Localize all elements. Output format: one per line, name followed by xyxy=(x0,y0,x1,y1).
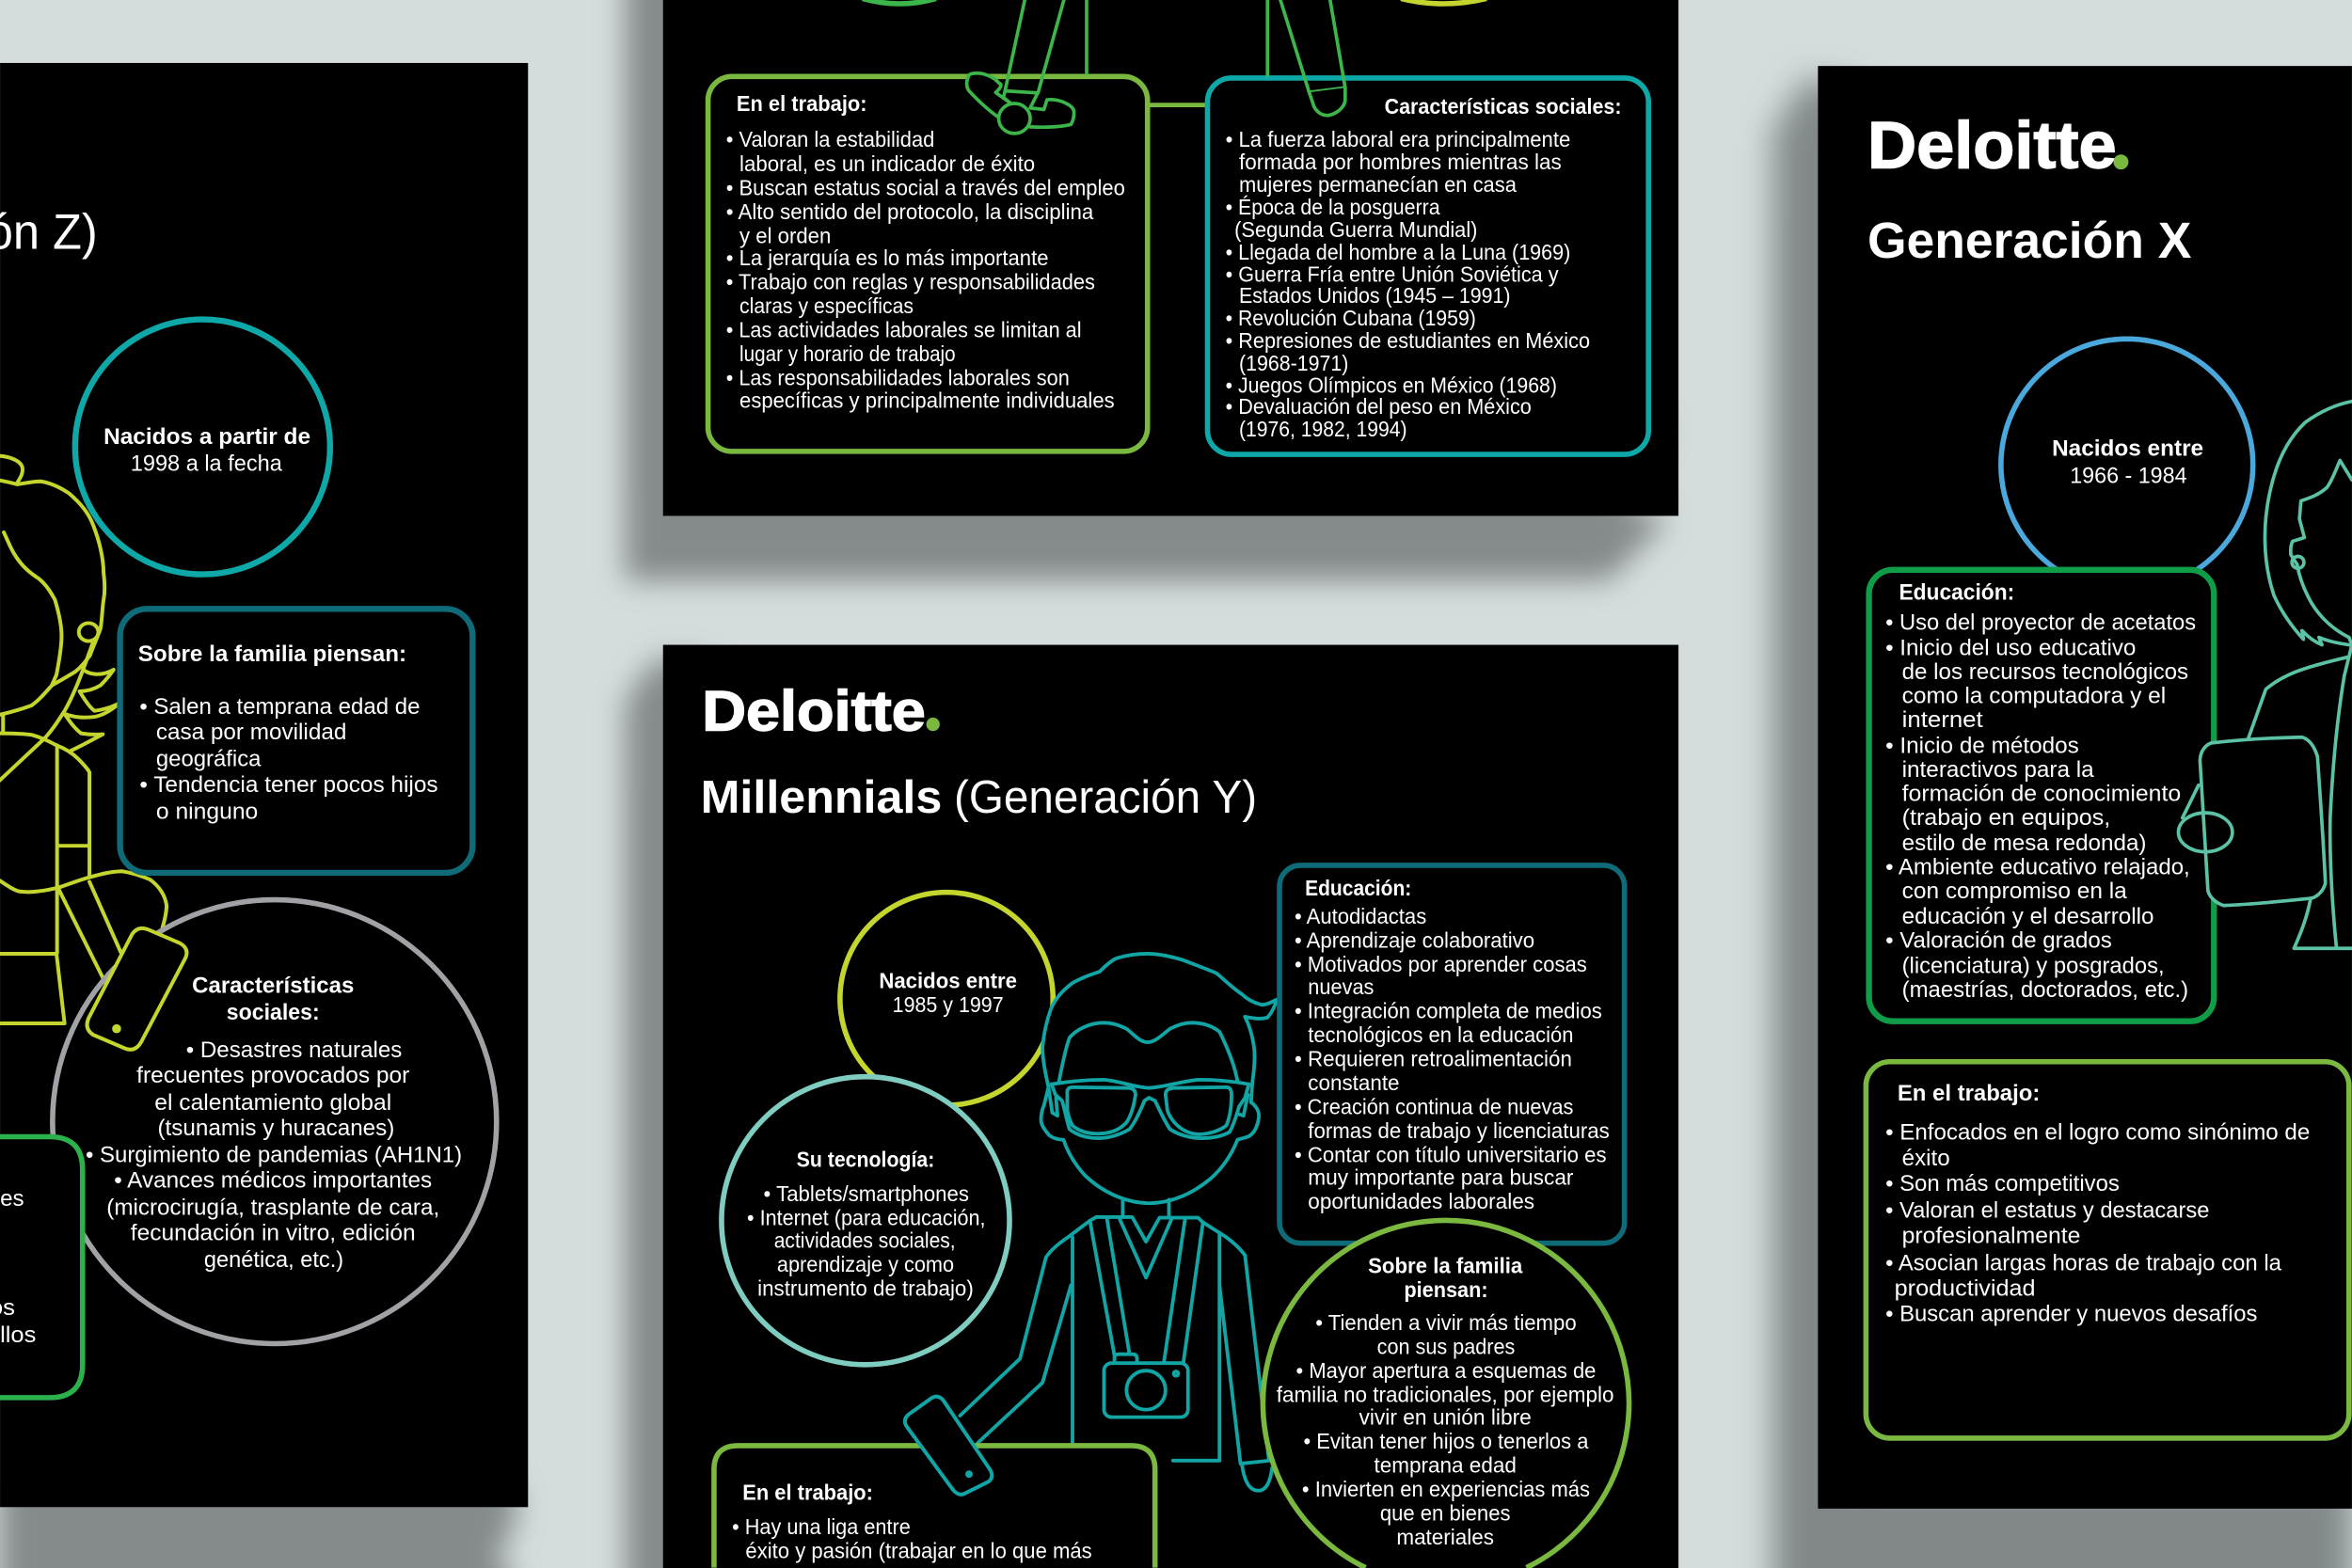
box: Características sociales xyxy=(1207,78,1648,454)
box: En el trabajo: En el trabajo: xyxy=(737,91,867,116)
box: Características sociales: Estados Unidos (1945 – 1991) xyxy=(1239,283,1511,308)
box: Sobre la familia piensan: • Tendencia tener pocos hijos xyxy=(139,772,438,798)
circle: Características sociales: • Desastres naturales xyxy=(186,1037,402,1063)
panel: Millennials poster xyxy=(663,645,1678,1568)
box: En el trabajo: • La jerarquía es lo más importante xyxy=(726,245,1048,270)
circle: birth years: 1966 - 1984 xyxy=(2070,463,2187,488)
circle: Su tecnología: Su tecnología: xyxy=(797,1147,934,1171)
box: cropped green text box: llos xyxy=(0,1323,36,1348)
box: Educación: Educación: xyxy=(1305,876,1411,900)
circle: Características sociales: frecuentes provocados por xyxy=(136,1063,409,1088)
box: En el trabajo: • Las responsabilidades laborales son xyxy=(726,366,1070,390)
icon: smartphone xyxy=(905,1397,992,1495)
panel: Baby Boomers poster (lower part) xyxy=(663,0,1678,515)
box: Educación: • Aprendizaje colaborativo xyxy=(1295,928,1534,953)
panel: Generación X poster xyxy=(1818,66,2352,1509)
box: En el trabajo: • Valoran el estatus y destacarse xyxy=(1885,1198,2209,1224)
box: Educación: • Contar con título universitario es xyxy=(1295,1143,1607,1167)
box: Características sociales: mujeres permanecían en casa xyxy=(1239,172,1517,197)
box: Características sociales: (1976, 1982, 1994) xyxy=(1239,417,1407,441)
circle: Sobre la familia piensan: • Evitan tener hijos o tenerlos a xyxy=(1304,1429,1589,1453)
box: Educación: como la computadora y el xyxy=(1902,684,2166,709)
box: Sobre la familia piensan: • Salen a temprana edad de xyxy=(139,694,420,720)
box: Características sociales: • Juegos Olímpicos en México (1968) xyxy=(1226,373,1557,398)
box: En el trabajo: éxito xyxy=(1902,1146,1950,1171)
box: En el trabajo: laboral, es un indicador de éxito xyxy=(739,151,1035,176)
box: Características sociales: • Represiones de estudiantes en México xyxy=(1226,328,1590,353)
box: En el trabajo: específicas y principalmente individuales xyxy=(739,388,1115,413)
box: En el trabajo: • Enfocados en el logro como sinónimo de xyxy=(1885,1120,2310,1146)
circle: birth years xyxy=(75,320,330,575)
title: Millennials (Generación Y) xyxy=(701,771,1257,823)
box: Sobre la familia piensan: casa por movilidad xyxy=(156,720,346,745)
circle: Su tecnología: instrumento de trabajo) xyxy=(757,1275,974,1300)
box: Educación: estilo de mesa redonda) xyxy=(1902,831,2147,856)
circle: Sobre la familia piensan: con sus padres xyxy=(1377,1335,1515,1359)
box: Sobre la familia piensan: geográfica xyxy=(156,747,262,772)
box: Educación xyxy=(1279,865,1625,1243)
illustration: girl with phone xyxy=(0,456,167,1023)
box: Educación: • Motivados por aprender cosas xyxy=(1295,952,1587,976)
box: Características sociales: • Llegada del hombre a la Luna (1969) xyxy=(1226,240,1570,264)
box: Educación: internet xyxy=(1902,707,1983,733)
circle: Sobre la familia piensan: temprana edad xyxy=(1374,1453,1517,1478)
box: Educación: • Ambiente educativo relajado, xyxy=(1885,854,2190,879)
box: Educación: • Valoración de grados xyxy=(1885,928,2112,954)
box: En el trabajo: • Valoran la estabilidad xyxy=(726,127,934,151)
circle: Su tecnología: aprendizaje y como xyxy=(777,1252,954,1276)
box: Educación: nuevas xyxy=(1308,974,1374,999)
box: Educación: formas de trabajo y licenciaturas xyxy=(1308,1118,1610,1143)
box: Características sociales: Características sociales: xyxy=(1385,94,1622,119)
box: Educación: interactivos para la xyxy=(1902,757,2094,783)
circle: Sobre la familia piensan: familia no tradicionales, por ejemplo xyxy=(1277,1383,1614,1407)
panel: Generación Z poster xyxy=(0,63,528,1507)
circle: Su tecnología: • Tablets/smartphones xyxy=(764,1181,969,1206)
circle: birth years: 1985 y 1997 xyxy=(893,992,1004,1017)
box: En el trabajo: productividad xyxy=(1895,1275,2036,1301)
box: En el trabajo xyxy=(1866,1062,2349,1438)
circle: Sobre la familia piensan: que en bienes xyxy=(1380,1501,1511,1526)
box: Educación: • Integración completa de medios xyxy=(1295,999,1602,1023)
title: Millennials (Generación Y): (Generación Y) xyxy=(954,771,1257,823)
circle: Características sociales: fecundación in vitro, edición xyxy=(131,1220,416,1245)
circle: birth years xyxy=(840,893,1053,1105)
circle: Su tecnología: actividades sociales, xyxy=(774,1227,956,1252)
box: Características sociales: • Devaluación del peso en México xyxy=(1226,394,1532,419)
title: Millennials (Generación Y): Millennials xyxy=(701,771,942,823)
box: Características sociales: (Segunda Guerra Mundial) xyxy=(1234,217,1477,242)
circle: Características sociales: genética, etc.) xyxy=(204,1247,343,1273)
circle: birth years: Nacidos a partir de xyxy=(103,424,310,450)
icon: smartphone xyxy=(87,928,186,1050)
box: Educación: constante xyxy=(1308,1070,1400,1095)
box: Sobre la familia piensan xyxy=(120,609,472,873)
circle: Características sociales: (microcirugía, trasplante de cara, xyxy=(106,1195,439,1220)
box: Educación: • Requieren retroalimentación xyxy=(1295,1047,1572,1071)
illustration: man with glasses and camera xyxy=(960,954,1277,1491)
title: Generación X: Generación X xyxy=(1867,213,2191,269)
connector between boxes xyxy=(1148,103,1207,106)
box: En el trabajo: profesionalmente xyxy=(1902,1224,2080,1249)
circle: Características sociales: Características xyxy=(192,973,354,998)
circle: Sobre la familia piensan: Sobre la familia xyxy=(1368,1254,1522,1278)
circle: Sobre la familia piensan: piensan: xyxy=(1404,1277,1488,1302)
box: En el trabajo xyxy=(708,76,1148,451)
box: cropped green text box xyxy=(0,1136,83,1398)
box: Características sociales: • La fuerza laboral era principalmente xyxy=(1226,127,1570,151)
circle: birth years: 1998 a la fecha xyxy=(131,451,282,477)
box: Características sociales: • Revolución Cubana (1959) xyxy=(1226,306,1476,330)
box: Educación: • Autodidactas xyxy=(1295,904,1426,928)
circle: birth years xyxy=(2001,339,2253,591)
circle: Características sociales: el calentamiento global xyxy=(154,1090,391,1116)
circle: Sobre la familia piensan: • Mayor apertura a esquemas de xyxy=(1296,1358,1596,1383)
box: Educación: (trabajo en equipos, xyxy=(1902,805,2110,831)
box: En el trabajo: claras y específicas xyxy=(739,293,914,318)
box: En el trabajo: • Hay una liga entre xyxy=(732,1514,911,1539)
box: En el trabajo: • Las actividades laborales se limitan al xyxy=(726,318,1082,342)
circle: Características sociales xyxy=(53,900,497,1343)
circle: Características sociales: • Surgimiento de pandemias (AH1N1) xyxy=(86,1143,462,1168)
box: Educación: educación y el desarrollo xyxy=(1902,904,2153,929)
box: Educación: • Creación continua de nuevas xyxy=(1295,1095,1573,1119)
box: En el trabajo xyxy=(714,1446,1155,1568)
box: En el trabajo: lugar y horario de trabajo xyxy=(739,341,956,366)
circle: Sobre la familia piensan: vivir en unión libre xyxy=(1359,1405,1532,1430)
circle: birth years: Nacidos entre xyxy=(2052,436,2203,462)
circle: birth years: Nacidos entre xyxy=(879,969,1017,993)
box: Educación: formación de conocimiento xyxy=(1902,781,2181,806)
box: Educación: • Inicio de métodos xyxy=(1885,733,2079,758)
box: Educación: oportunidades laborales xyxy=(1308,1189,1534,1213)
box: En el trabajo: • Son más competitivos xyxy=(1885,1171,2120,1196)
box: Educación: de los recursos tecnológicos xyxy=(1902,659,2188,685)
box: En el trabajo: En el trabajo: xyxy=(742,1480,873,1504)
circle: Características sociales: • Avances médicos importantes xyxy=(114,1168,432,1194)
box: Educación: muy importante para buscar xyxy=(1308,1164,1574,1189)
box: Características sociales: (1968-1971) xyxy=(1239,351,1348,375)
box: Características sociales: • Época de la posguerra xyxy=(1226,195,1440,219)
box: Educación: • Uso del proyector de acetatos xyxy=(1885,610,2196,636)
illustration: woman with tablet xyxy=(2178,402,2352,948)
box: Educación: tecnológicos en la educación xyxy=(1308,1022,1573,1047)
box: En el trabajo: • Trabajo con reglas y responsabilidades xyxy=(726,270,1095,294)
box: cropped green text box: es xyxy=(0,1186,24,1212)
box: Educación: (licenciatura) y posgrados, xyxy=(1902,954,2165,979)
box: Educación: con compromiso en la xyxy=(1902,879,2128,904)
logo: Deloitte: Deloitte xyxy=(1867,109,2117,182)
box: En el trabajo: y el orden xyxy=(739,223,831,247)
circle: Sobre la familia piensan: • Invierten en experiencias más xyxy=(1302,1477,1590,1501)
box: En el trabajo: • Buscan estatus social a través del empleo xyxy=(726,175,1125,199)
box: Educación: (maestrías, doctorados, etc.) xyxy=(1902,977,2188,1003)
box: Sobre la familia piensan: o ninguno xyxy=(156,799,258,824)
circle: Su tecnología: • Internet (para educación, xyxy=(747,1206,986,1230)
circle: Características sociales: sociales: xyxy=(227,1000,320,1025)
box: Educación: • Inicio del uso educativo xyxy=(1885,636,2136,661)
circle: Su tecnología xyxy=(722,1077,1009,1365)
circle: Sobre la familia piensan: • Tienden a vivir más tiempo xyxy=(1315,1310,1577,1335)
box: En el trabajo: • Asocian largas horas de trabajo con la xyxy=(1885,1250,2282,1275)
box: Características sociales: • Guerra Fría entre Unión Soviética y xyxy=(1226,262,1559,287)
box: En el trabajo: • Alto sentido del protocolo, la disciplina xyxy=(726,199,1093,224)
box: Características sociales: formada por hombres mientras las xyxy=(1239,150,1562,174)
decorative cropped circles at top xyxy=(863,0,1486,4)
box: En el trabajo: éxito y pasión (trabajar en lo que más xyxy=(745,1538,1092,1562)
box: Educación xyxy=(1869,570,2214,1022)
box: Educación: Educación: xyxy=(1899,580,2014,606)
logo: Deloitte: Deloitte xyxy=(702,678,926,742)
circle: Sobre la familia piensan xyxy=(1263,1220,1629,1568)
circle: Características sociales: (tsunamis y huracanes) xyxy=(157,1116,394,1141)
box: En el trabajo: • Buscan aprender y nuevos desafíos xyxy=(1885,1302,2258,1327)
circle: Sobre la familia piensan: materiales xyxy=(1396,1525,1494,1549)
box: Sobre la familia piensan: Sobre la familia piensan: xyxy=(138,641,406,667)
box: En el trabajo: En el trabajo: xyxy=(1898,1081,2040,1106)
illustration: figure legs and shoes xyxy=(967,0,1345,134)
